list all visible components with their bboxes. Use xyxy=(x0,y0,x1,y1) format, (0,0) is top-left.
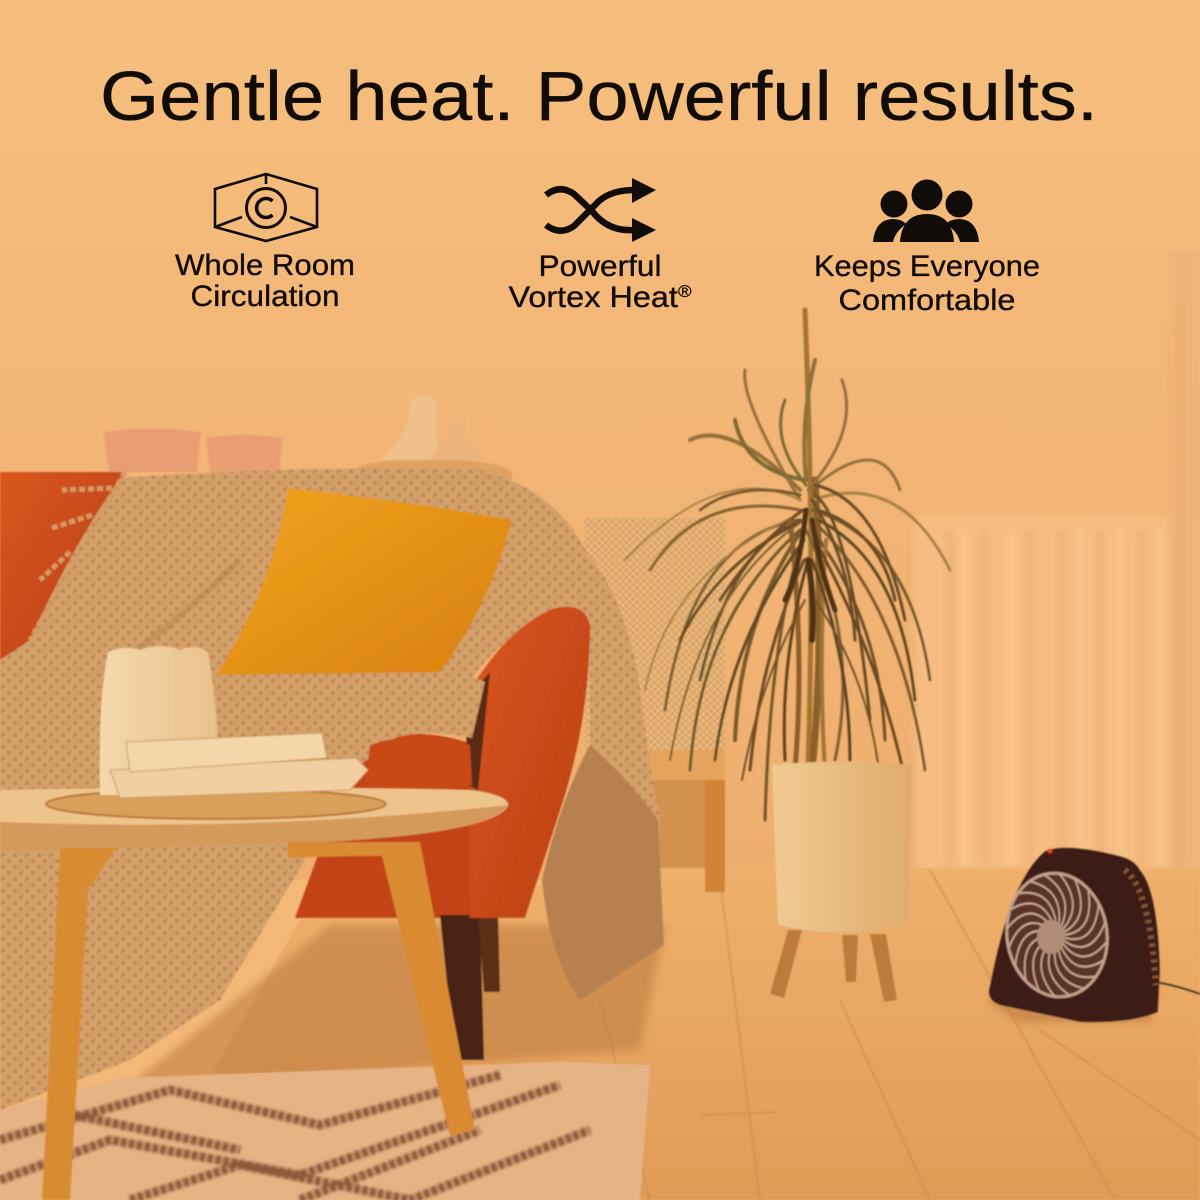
plant leaves xyxy=(625,310,950,820)
sofa xyxy=(0,472,500,1060)
table tray xyxy=(46,789,386,819)
label: powerful vortex heat: Vortex Heat xyxy=(508,281,665,314)
woven throw blanket xyxy=(0,469,660,1110)
potted plant xyxy=(625,310,950,1002)
title: Gentle heat. Powerful results. xyxy=(100,57,1098,135)
heater xyxy=(989,847,1200,1022)
icon: whole room xyxy=(215,174,317,241)
plant pot xyxy=(772,762,912,932)
label: powerful vortex heat: Powerful xyxy=(538,250,662,283)
curtain xyxy=(915,250,1200,870)
books xyxy=(110,758,368,798)
label: powerful vortex heat xyxy=(508,250,692,314)
shadow under the sofa xyxy=(130,925,665,1085)
yellow cushion xyxy=(216,488,512,682)
side table xyxy=(0,646,508,1200)
throw fringe xyxy=(30,472,125,640)
hanging blanket end xyxy=(542,745,664,1000)
pot legs xyxy=(770,930,897,1002)
label: keeps everyone comfortable xyxy=(814,250,1040,317)
icon: group of people xyxy=(873,180,979,242)
label: powerful vortex heat: ® xyxy=(678,282,692,301)
floor boards xyxy=(600,870,1200,1200)
sofa arm xyxy=(365,607,590,918)
icon: vortex arrows xyxy=(546,178,656,242)
floor xyxy=(140,868,1200,1200)
throw folds xyxy=(0,560,330,1000)
label: whole room circulation: Circulation xyxy=(190,280,340,313)
label: whole room circulation xyxy=(175,249,355,313)
living room scene xyxy=(0,250,1200,1200)
heater cord xyxy=(1155,982,1200,994)
label: keeps everyone comfortable: Keeps Everyone xyxy=(814,250,1040,283)
sideboard with cane front xyxy=(545,488,725,892)
heater fan grille xyxy=(997,864,1117,1006)
table vase xyxy=(100,646,218,795)
pots and vases on the shelf xyxy=(104,395,512,480)
rug xyxy=(0,1062,650,1200)
label: whole room circulation: Whole Room xyxy=(175,249,355,282)
background: wall xyxy=(0,0,1200,880)
blanket draped over the seat xyxy=(0,665,485,1110)
label: keeps everyone comfortable: Comfortable xyxy=(838,284,1016,317)
heater body xyxy=(989,847,1160,1022)
